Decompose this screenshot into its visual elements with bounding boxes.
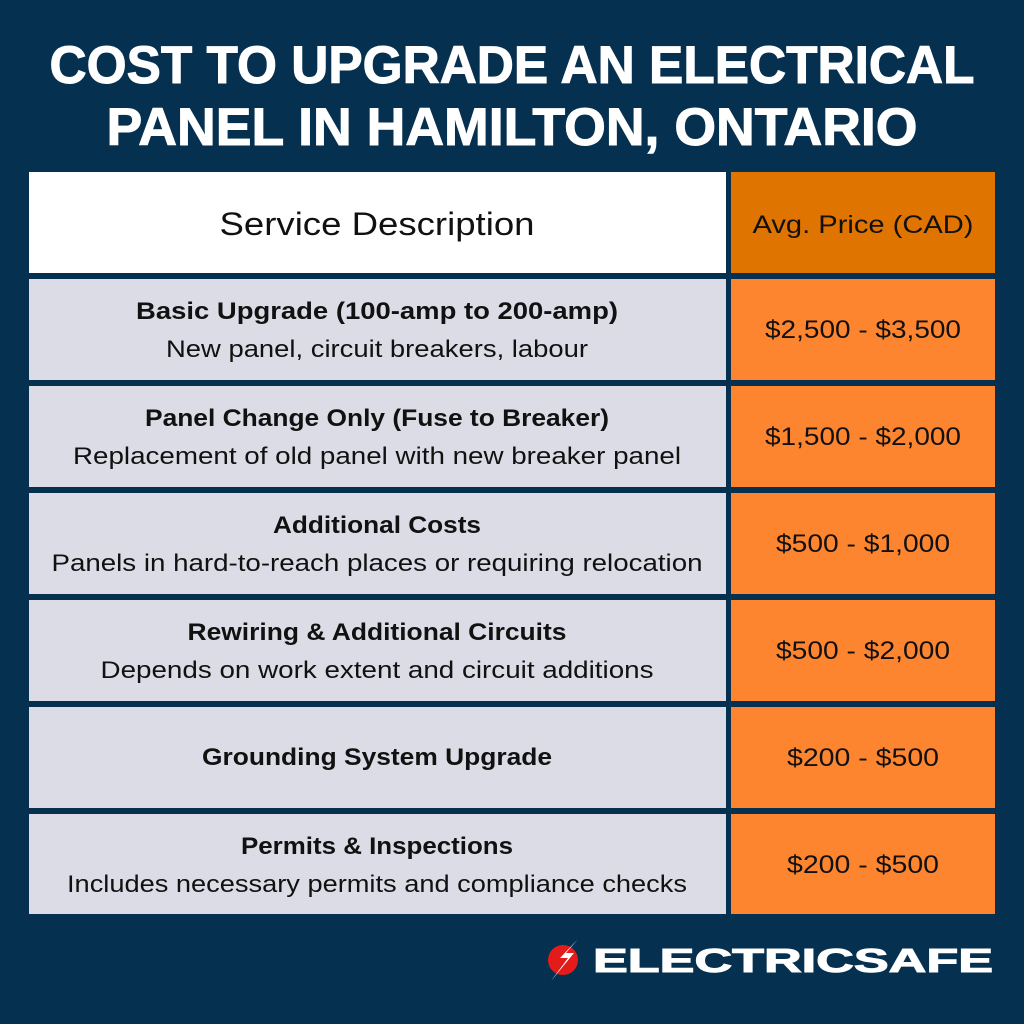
row: grounding: $200 - $500: [787, 744, 939, 772]
row: panel change: Replacement of old panel with new breaker panel: [73, 443, 681, 470]
table: [29, 172, 995, 914]
row: rewiring: Depends on work extent and circuit additions: [100, 657, 654, 684]
row: basic upgrade: [29, 279, 995, 380]
header row: Service Description: [220, 206, 534, 242]
row: additional costs: Panels in hard-to-reach places or requiring relocation: [52, 550, 702, 577]
row: panel change: $1,500 - $2,000: [765, 423, 961, 451]
header row: [29, 172, 995, 273]
row: additional costs: $500 - $1,000: [776, 530, 950, 558]
title: PANEL IN HAMILTON, ONTARIO: [106, 98, 918, 157]
row: permits: Includes necessary permits and compliance checks: [67, 871, 687, 898]
logo: ELECTRICSAFE: [593, 942, 993, 979]
row: grounding: [29, 707, 995, 808]
row: permits: Permits & Inspections: [241, 833, 513, 860]
row: rewiring: $500 - $2,000: [776, 637, 950, 665]
icon: lightning: [548, 939, 578, 981]
row: rewiring: [29, 600, 995, 701]
header row: Avg. Price (CAD): [752, 211, 974, 239]
row: basic upgrade: $2,500 - $3,500: [765, 316, 961, 344]
row: rewiring: Rewiring & Additional Circuits: [188, 619, 566, 646]
row: panel change: [29, 386, 995, 487]
row: permits: $200 - $500: [787, 851, 939, 879]
row: additional costs: [29, 493, 995, 594]
row: basic upgrade: New panel, circuit breakers, labour: [166, 336, 588, 363]
logo: [548, 939, 993, 981]
row: grounding: Grounding System Upgrade: [202, 744, 552, 771]
row: permits: [29, 814, 995, 914]
title: [50, 36, 974, 157]
title: COST TO UPGRADE AN ELECTRICAL: [50, 36, 974, 95]
row: basic upgrade: Basic Upgrade (100-amp to 200-amp): [136, 298, 618, 325]
row: panel change: Panel Change Only (Fuse to Breaker): [145, 405, 609, 432]
row: additional costs: Additional Costs: [273, 512, 481, 539]
